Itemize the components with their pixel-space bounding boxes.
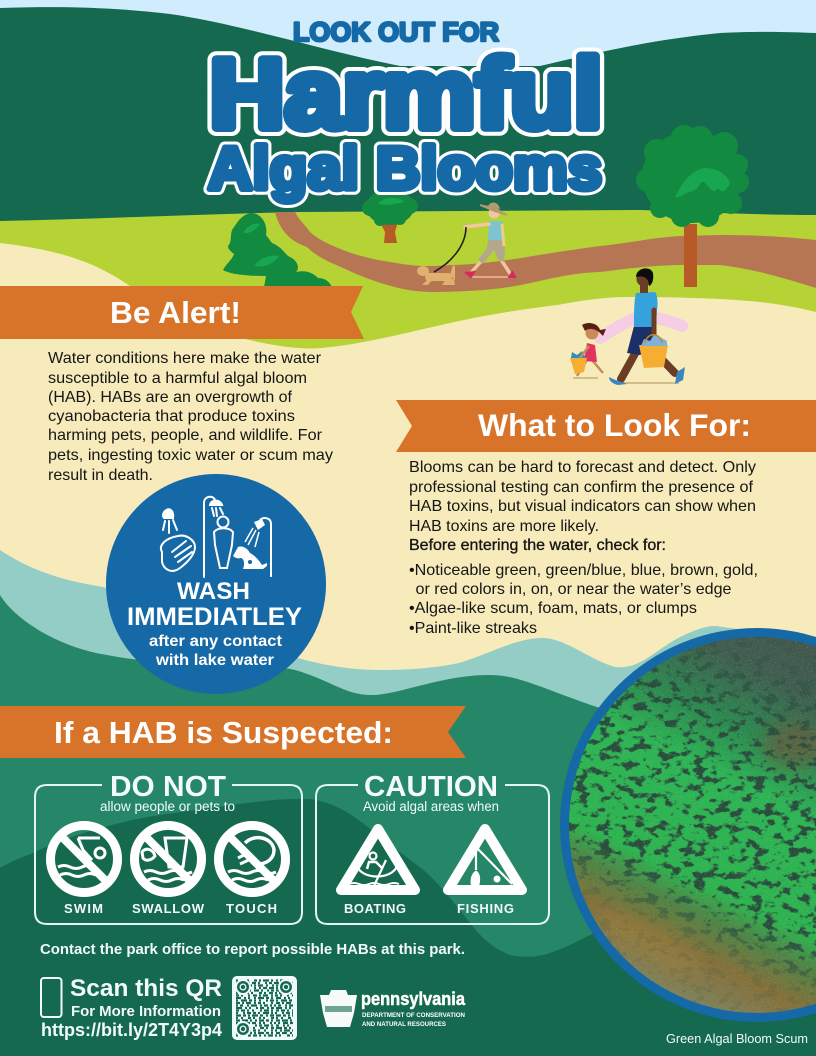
illustration: man and child carrying beach gear xyxy=(570,268,685,385)
title line: algal blooms: Algal Blooms xyxy=(208,135,602,202)
woman other arm xyxy=(502,224,504,246)
text block: be alert description: susceptible to a harmful algal bloom xyxy=(48,370,307,387)
icon: caution fishing xyxy=(448,829,522,890)
panel: do not xyxy=(35,771,302,924)
man shirt xyxy=(634,292,658,327)
text block: what to look for: professional testing can confirm the presence of xyxy=(409,479,754,496)
text block: what to look for: HAB toxins, but visual indicators can show when xyxy=(409,498,756,515)
dog xyxy=(417,265,455,285)
panel: caution xyxy=(316,771,549,924)
badge line: with lake water: with lake water xyxy=(155,652,274,669)
brown walking path xyxy=(275,212,816,292)
banner: if a hab is suspected xyxy=(0,706,466,758)
icon: large tree right xyxy=(636,125,749,287)
icon: phone outline xyxy=(41,978,62,1017)
woman legs xyxy=(469,258,511,275)
child hair xyxy=(582,323,606,336)
badge heading: wash: WASH xyxy=(177,578,250,605)
banner: be alert xyxy=(0,286,364,339)
icon: washing hands xyxy=(161,509,195,571)
wordmark: pennsylvania: pennsylvania xyxy=(361,988,466,1009)
caption: green algal bloom scum: Green Algal Bloom Scum xyxy=(666,1032,808,1046)
text block: what to look for: Blooms can be hard to forecast and detect. Only xyxy=(409,459,756,476)
text block: what to look for: •Paint-like streaks xyxy=(409,620,537,637)
wordmark: department line: DEPARTMENT OF CONSERVATION xyxy=(362,1012,465,1019)
child arm xyxy=(580,346,589,358)
text block: what to look for xyxy=(409,459,758,637)
man neck xyxy=(640,285,648,293)
woman arm xyxy=(465,224,489,227)
leash xyxy=(434,227,466,272)
icon: person under shower xyxy=(204,497,233,577)
wordmark: resources line: AND NATURAL RESOURCES xyxy=(362,1021,447,1028)
teal shoreline band xyxy=(0,550,816,800)
dark green foreground hill xyxy=(0,799,816,1056)
sky background xyxy=(0,0,816,300)
shadow child xyxy=(573,377,598,379)
text block: be alert description: result in death. xyxy=(48,467,153,484)
label: swim: SWIM xyxy=(64,901,103,916)
subheading: avoid algal areas when: Avoid algal areas when xyxy=(363,799,499,814)
text block: be alert description: pets, ingesting toxic water or scum may xyxy=(48,447,333,464)
text block: what to look for: •Algae-like scum, foam, mats, or clumps xyxy=(409,600,697,617)
text: contact the park office: Contact the park office to report possible HABs at this park. xyxy=(40,942,465,958)
heading: what to look for: What to Look For: xyxy=(478,407,751,443)
man bucket xyxy=(639,345,668,368)
woman hat xyxy=(480,203,507,215)
illustration: woman walking dog xyxy=(417,203,515,285)
icon: no touching xyxy=(218,826,286,892)
QR code xyxy=(232,976,297,1040)
icon: no swallowing xyxy=(134,826,202,892)
text: for more information: For More Information xyxy=(71,1004,221,1020)
label: swallow: SWALLOW xyxy=(132,901,205,916)
man shoes xyxy=(609,367,685,385)
woman head xyxy=(488,208,500,218)
mid green lake band xyxy=(0,595,816,1056)
text block: what to look for: or red colors in, on, or near the water’s edge xyxy=(416,581,732,598)
title line: harmful: Harmful xyxy=(210,38,602,148)
heading: be alert: Be Alert! xyxy=(110,295,241,330)
man shorts xyxy=(627,326,656,355)
child head xyxy=(586,326,598,340)
heading: if a hab is suspected: If a HAB is Suspected: xyxy=(54,716,393,750)
beach toys xyxy=(641,335,667,346)
text: short url: https://bit.ly/2T4Y3p4 xyxy=(41,1020,222,1040)
icon: caution boating xyxy=(341,829,415,890)
text block: be alert description: Water conditions here make the water xyxy=(48,350,322,367)
text block: be alert description: harming pets, people, and wildlife. For xyxy=(48,427,323,444)
man hair xyxy=(636,268,653,286)
woman shoes xyxy=(465,271,515,277)
text block: what to look for: Before entering the water, check for: xyxy=(409,537,666,554)
subheading: allow people or pets to: allow people or pets to xyxy=(100,799,235,814)
shadow under woman xyxy=(470,276,512,278)
child toys xyxy=(571,351,586,358)
icon: no swimming xyxy=(50,826,118,892)
text: scan this qr: Scan this QR xyxy=(70,975,222,1002)
child legs xyxy=(577,360,603,376)
label: boating: BOATING xyxy=(344,901,406,916)
text block: be alert description: cyanobacteria that produce toxins xyxy=(48,408,295,425)
title line: look out for: LOOK OUT FOR xyxy=(293,17,499,47)
photo: green algal bloom scum xyxy=(560,620,816,1030)
text block: what to look for: •Noticeable green, green/blue, blue, brown, gold, xyxy=(409,562,758,579)
child dress xyxy=(584,343,597,362)
icon: bush left xyxy=(223,213,332,287)
pool noodle xyxy=(600,318,682,338)
badge: wash immediately xyxy=(106,474,326,694)
badge heading: immediatley: IMMEDIATLEY xyxy=(127,603,302,631)
bucket handle xyxy=(645,335,662,343)
title line: algal blooms outline: Algal Blooms xyxy=(208,135,602,202)
badge line: after any contact: after any contact xyxy=(149,633,283,650)
title xyxy=(208,17,602,202)
woman capris xyxy=(478,240,505,264)
banner: what to look for xyxy=(396,400,816,452)
text block: what to look for: HAB toxins are more likely. xyxy=(409,518,599,535)
far dark green hills xyxy=(0,7,816,230)
woman shirt xyxy=(488,221,505,240)
man head xyxy=(636,272,652,286)
text block: be alert description xyxy=(48,350,333,484)
man arm xyxy=(652,310,656,340)
man legs xyxy=(621,345,675,379)
heading: do not: DO NOT xyxy=(110,771,226,803)
child bucket xyxy=(570,358,587,374)
cream beach area xyxy=(0,243,816,720)
logo: pennsylvania keystone xyxy=(320,988,466,1028)
label: fishing: FISHING xyxy=(457,901,514,916)
shadow man xyxy=(618,382,679,384)
heading: caution: CAUTION xyxy=(364,771,498,803)
text block: be alert description: (HAB). HABs are an overgrowth of xyxy=(48,389,293,406)
icon: small tree centre xyxy=(362,188,418,243)
lime meadow xyxy=(0,210,816,420)
title line: harmful outline: Harmful xyxy=(210,38,602,148)
label: touch: TOUCH xyxy=(226,901,277,916)
icon: dog under shower xyxy=(233,518,271,577)
